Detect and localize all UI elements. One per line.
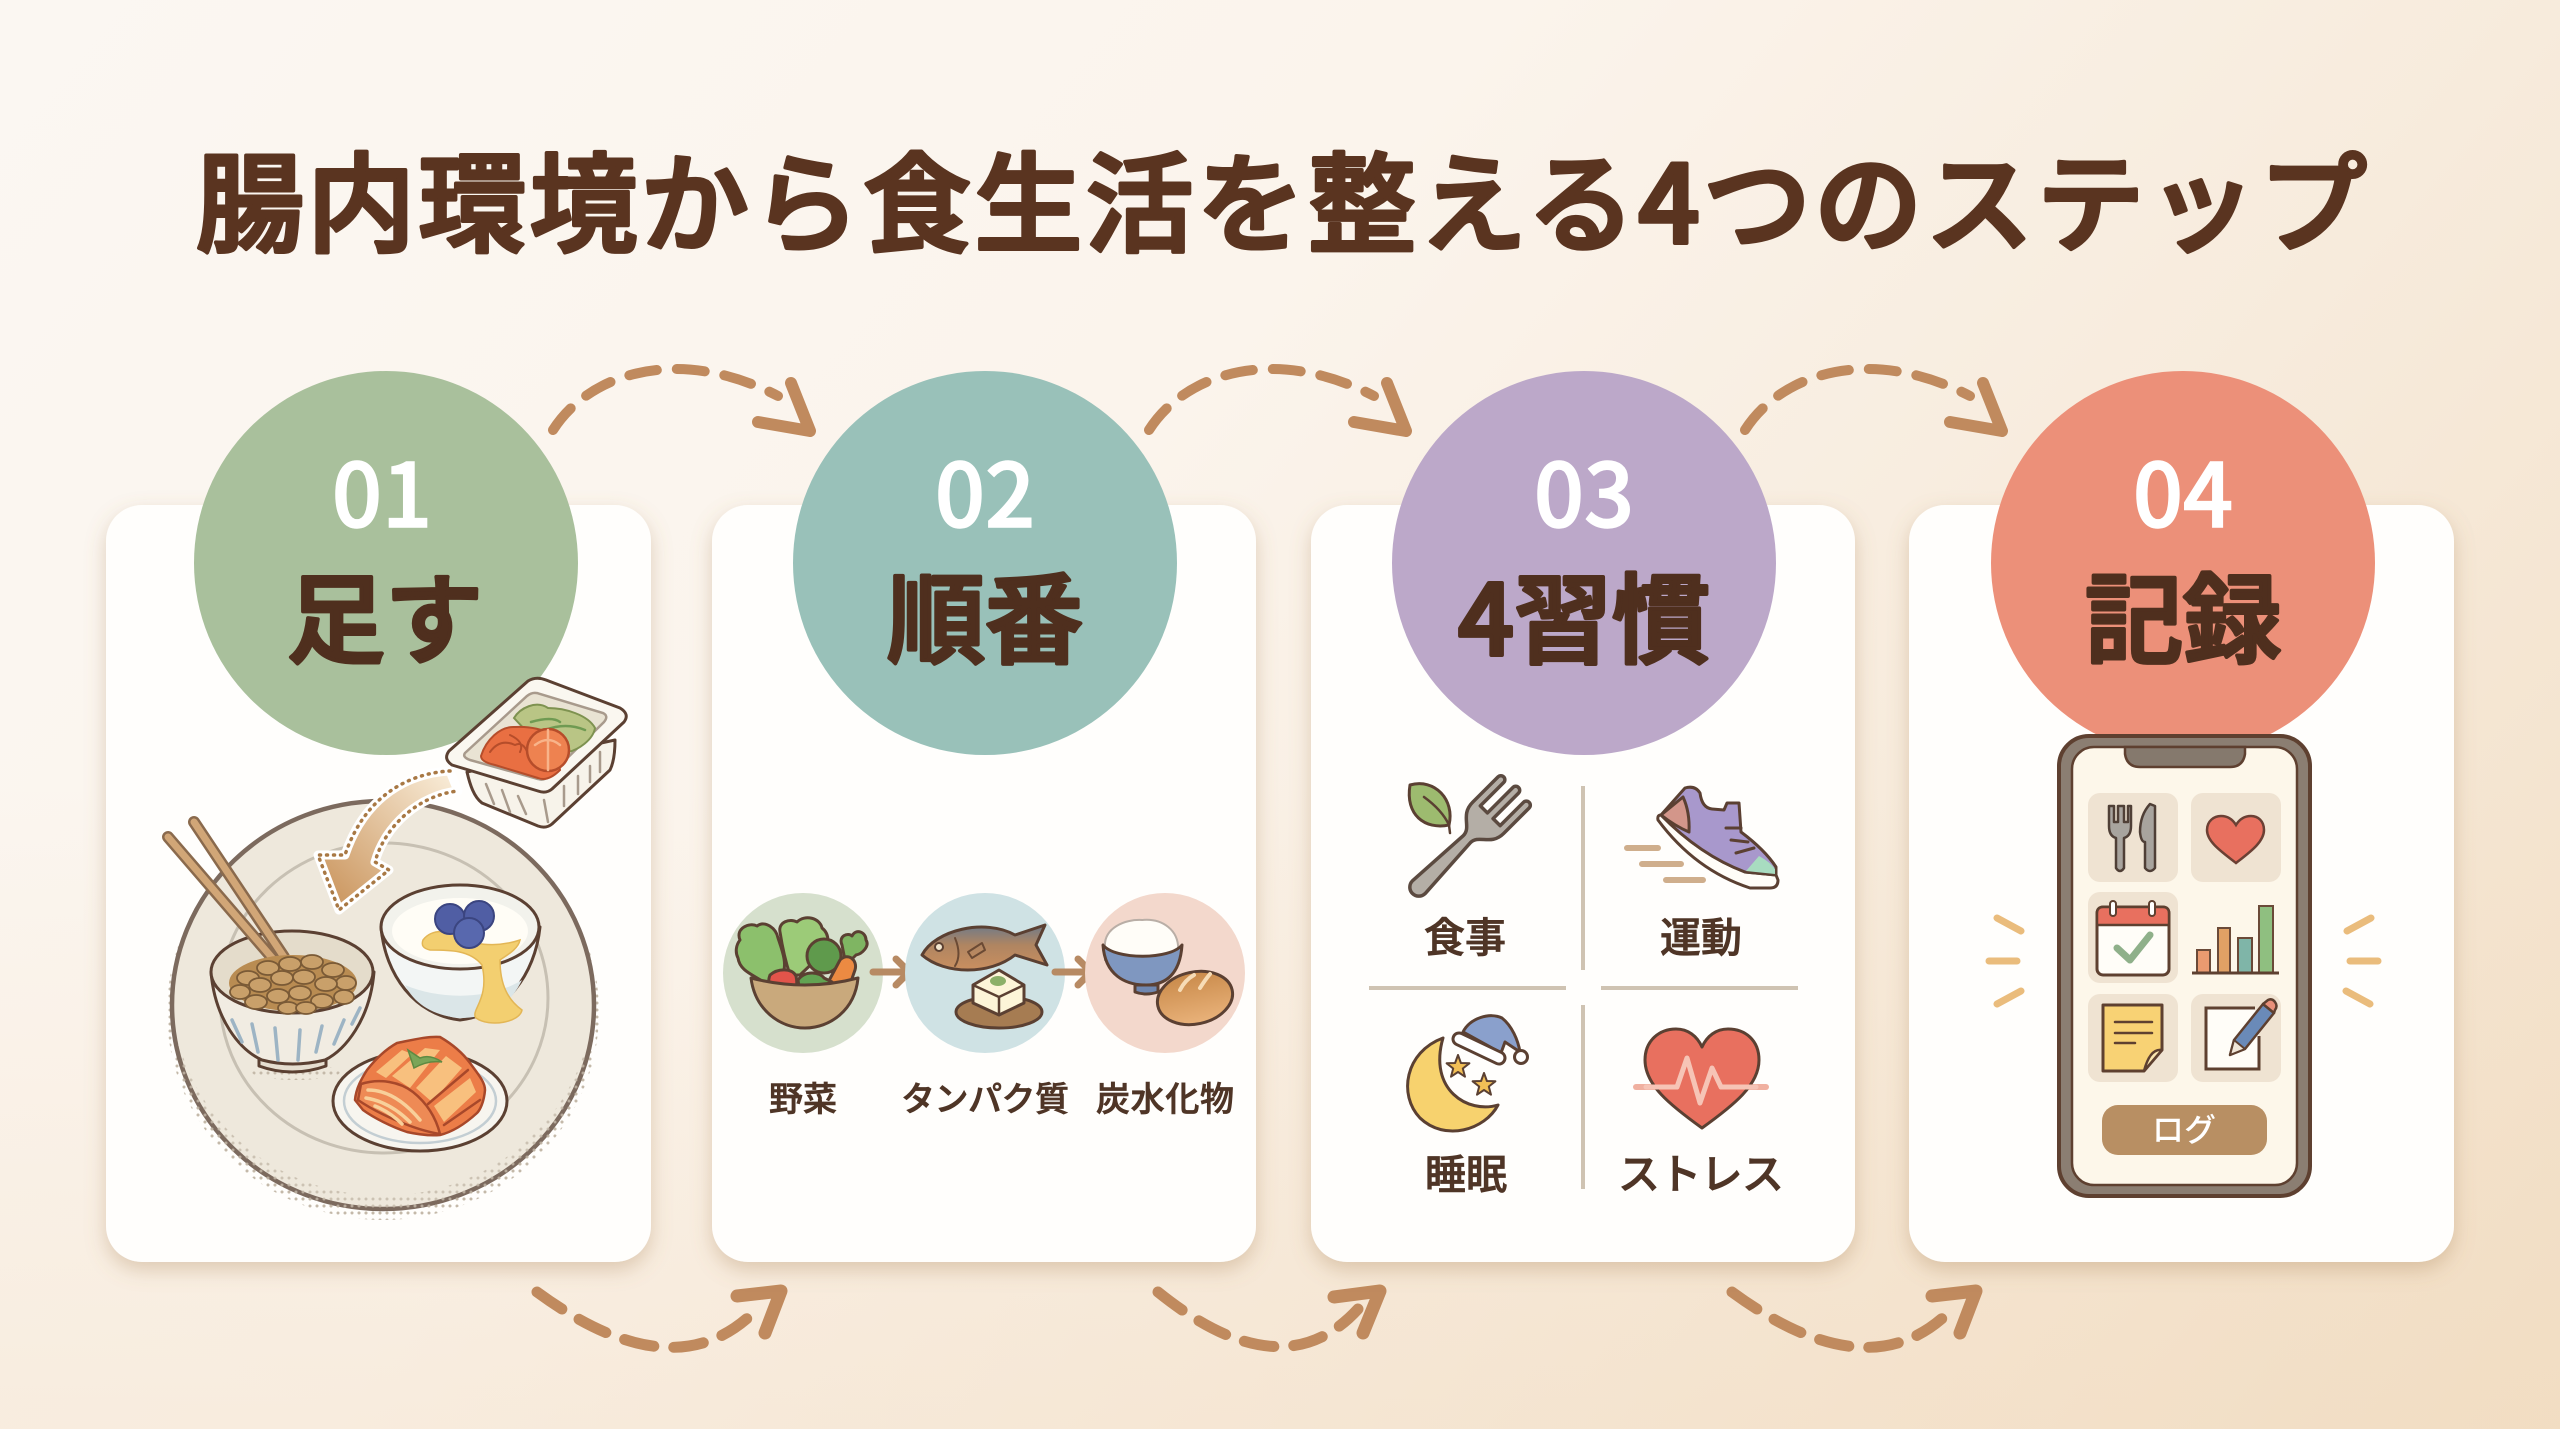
card 1 bbox=[106, 505, 651, 1262]
icon: edit bbox=[2206, 999, 2276, 1069]
labels bbox=[769, 1072, 1234, 1121]
badge: 04 記録 bbox=[1991, 371, 2375, 755]
labels: 野菜 bbox=[769, 1072, 837, 1121]
card 4 bbox=[1909, 505, 2454, 1262]
card 2 bbox=[712, 505, 1256, 1262]
labels: タンパク質 bbox=[901, 1072, 1069, 1121]
arrow: top 2 to 3 bbox=[1149, 369, 1406, 431]
arrow: bottom 2 to 3 bbox=[1158, 1291, 1380, 1347]
food order sequence bbox=[723, 893, 1245, 1121]
icon: bar chart bbox=[2192, 906, 2279, 973]
arrow bbox=[873, 959, 909, 985]
badge: 02 順番: 順番 bbox=[887, 542, 1083, 684]
badge: 03 4習慣: 4習慣 bbox=[1458, 542, 1710, 684]
habit: stress: ストレス bbox=[1618, 1141, 1784, 1202]
icon: fork and knife bbox=[2109, 804, 2155, 871]
badge: 01 足す: 足す bbox=[287, 542, 483, 684]
panel: step 3 4習慣 bbox=[1311, 371, 1855, 1262]
icon: vegetables bbox=[723, 893, 883, 1053]
habit: meal bbox=[1397, 772, 1534, 964]
icon: protein bbox=[905, 893, 1065, 1053]
habit: sleep bbox=[1408, 1016, 1528, 1201]
illustration: plate with fermented foods bbox=[167, 678, 626, 1220]
kimchi tray bbox=[447, 678, 626, 827]
icon: carbohydrates bbox=[1085, 893, 1245, 1053]
badge: 01 足す bbox=[194, 371, 578, 755]
arrow: top 3 to 4 bbox=[1745, 369, 2002, 431]
habit: stress bbox=[1618, 1029, 1784, 1202]
panel: step 4 記録 bbox=[1909, 371, 2454, 1262]
badge: 01 足す: 01 bbox=[332, 426, 432, 553]
badge: 03 4習慣 bbox=[1392, 371, 1776, 755]
badge: 03 4習慣: 03 bbox=[1534, 426, 1634, 553]
yogurt bowl with blueberries and honey bbox=[381, 885, 540, 1023]
badge: 02 順番: 02 bbox=[935, 426, 1035, 553]
arrow bbox=[1055, 959, 1091, 985]
arrow: bottom 1 to 2 bbox=[537, 1291, 781, 1347]
arrow: top 1 to 2 bbox=[553, 369, 810, 431]
phone bbox=[2059, 736, 2310, 1196]
habit: exercise: 運動 bbox=[1660, 904, 1742, 964]
habit: exercise bbox=[1627, 787, 1778, 964]
badge: 02 順番 bbox=[793, 371, 1177, 755]
habit: sleep: 睡眠 bbox=[1425, 1141, 1507, 1201]
button: log: ログ bbox=[2152, 1105, 2216, 1151]
dotted add arrow bbox=[318, 771, 458, 910]
habit: meal: 食事 bbox=[1424, 904, 1506, 964]
panel: step 1 足す bbox=[106, 371, 651, 1262]
labels: 炭水化物 bbox=[1096, 1072, 1234, 1121]
icon: memo bbox=[2103, 1005, 2162, 1071]
kimchi plate bbox=[333, 1037, 507, 1151]
icon: heart bbox=[2207, 816, 2264, 863]
app tiles bbox=[2088, 793, 2281, 1082]
badge: 04 記録: 記録 bbox=[2085, 542, 2281, 684]
natto bowl with chopsticks bbox=[168, 822, 374, 1080]
arrow: bottom 3 to 4 bbox=[1732, 1291, 1976, 1347]
panel: step 2 順番 bbox=[712, 371, 1256, 1262]
card 3 bbox=[1311, 505, 1855, 1262]
badge: 04 記録: 04 bbox=[2133, 426, 2233, 553]
button: log bbox=[2102, 1105, 2267, 1155]
title: 腸内環境から食生活を整える4つのステップ bbox=[196, 119, 2367, 275]
sparkle lines bbox=[1989, 918, 2378, 1004]
icon: calendar bbox=[2097, 901, 2169, 975]
